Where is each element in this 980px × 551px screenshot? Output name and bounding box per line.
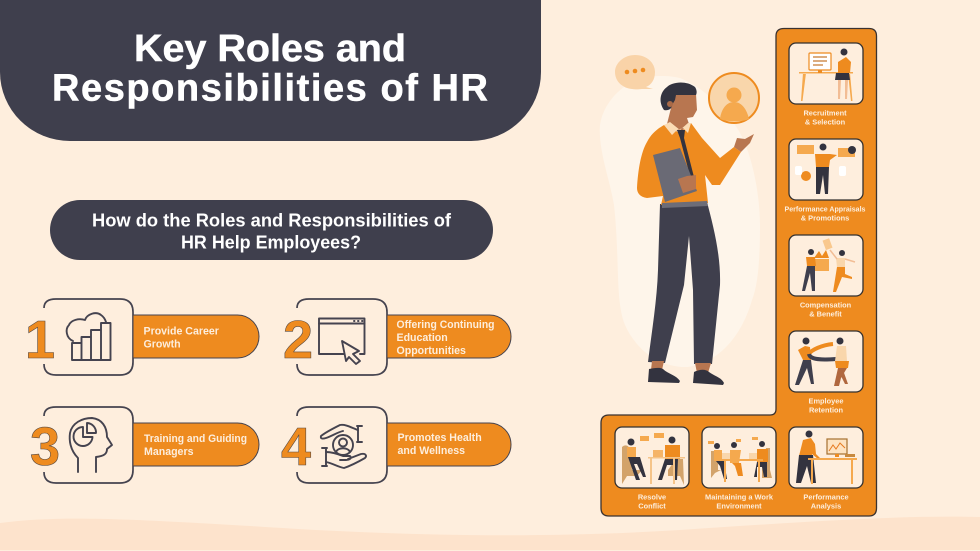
item 4: health and wellness [281, 407, 511, 483]
ankles [651, 361, 711, 373]
neck and face [667, 94, 697, 133]
item 2: continuing education: Opportunities [396, 345, 466, 357]
title: Key Roles and [134, 28, 406, 70]
label: Performance Appraisals [784, 204, 866, 214]
trousers [648, 202, 720, 364]
avatar circle [709, 73, 759, 123]
shoes [648, 368, 724, 385]
label: Recruitment [803, 108, 847, 118]
subheading pill [50, 200, 493, 260]
subheading pill: HR Help Employees? [181, 232, 361, 252]
icon: hands around person [321, 425, 366, 468]
card: recruitment [789, 43, 863, 126]
hand on tablet [678, 175, 696, 193]
speech bubble [615, 55, 655, 89]
label: Maintaining a Work [705, 492, 774, 502]
tablet [653, 148, 697, 202]
label: & Selection [805, 118, 846, 126]
icon: browser window and cursor [319, 318, 364, 364]
item 4: health and wellness: Promotes Health [398, 432, 482, 444]
illustration: HR person [637, 82, 754, 385]
label: Resolve [638, 492, 666, 502]
item 3: training managers: 3 [30, 417, 60, 477]
tie [677, 130, 694, 177]
label: Compensation [800, 300, 852, 310]
background blob behind person [600, 76, 760, 367]
item 2: continuing education: Offering Continuing [396, 319, 494, 331]
item 3: training managers: Managers [144, 446, 194, 458]
label: Analysis [811, 502, 841, 510]
subheading pill: How do the Roles and Responsibilities of [92, 210, 452, 230]
label: Employee [809, 396, 843, 406]
collar [664, 122, 691, 135]
item 1: career growth: Growth [144, 338, 181, 350]
card: performance appraisals [784, 139, 866, 222]
item 2: continuing education: Education [396, 332, 448, 344]
item 2: continuing education [283, 299, 511, 375]
icon: cloud and bars [67, 313, 110, 360]
item 4: health and wellness: 4 [281, 417, 311, 477]
label: Environment [716, 502, 762, 510]
label: & Promotions [801, 214, 849, 222]
belt [662, 201, 708, 208]
item 1: career growth: Provide Career [144, 326, 219, 338]
open hand [734, 134, 754, 152]
item 3: training managers [30, 407, 259, 483]
label: Conflict [638, 502, 666, 510]
label: Retention [809, 406, 844, 414]
hair [661, 82, 697, 110]
item 1: career growth [25, 299, 259, 375]
card: resolve conflict [615, 427, 689, 510]
ear [667, 101, 673, 107]
icon: head with pie chart [70, 418, 112, 472]
item 2: continuing education: 2 [283, 310, 313, 370]
item 3: training managers: Training and Guiding [144, 433, 247, 445]
card: employee retention [789, 331, 863, 414]
card: performance analysis [789, 427, 863, 510]
sweater torso and arms [637, 123, 741, 205]
card: compensation [789, 235, 863, 318]
label: & Benefit [809, 310, 842, 318]
title: Responsibilities of HR [52, 68, 488, 110]
item 1: career growth: 1 [25, 310, 55, 370]
label: Performance [803, 492, 849, 502]
panel: HR responsibilities [601, 28, 876, 516]
title banner [0, 0, 541, 141]
card: maintaining a work environment [702, 427, 776, 510]
item 4: health and wellness: and Wellness [398, 445, 465, 457]
